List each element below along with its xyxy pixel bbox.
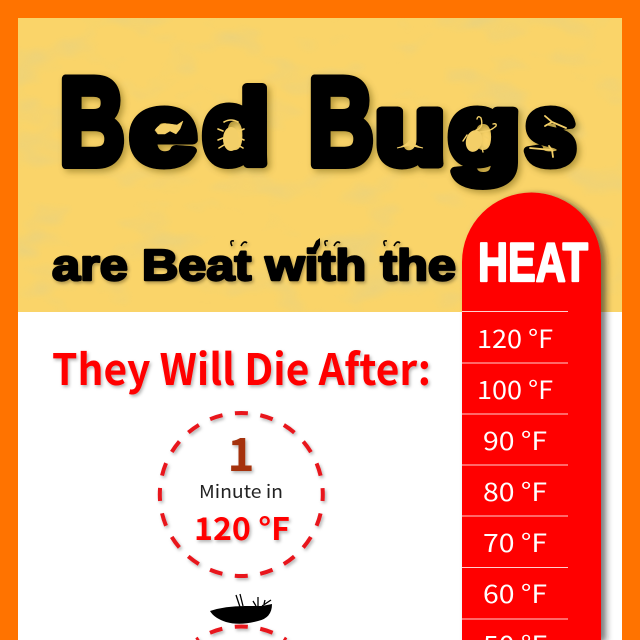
icon: bug cutouts in title letters bbox=[155, 116, 566, 157]
title: Bed Bugs: B bbox=[59, 54, 125, 192]
temperature scale: 80 °F bbox=[483, 473, 547, 509]
temperature scale bbox=[462, 312, 568, 640]
caption: Minute in bbox=[199, 478, 283, 504]
panel: white lower area bbox=[18, 312, 622, 640]
title: Bed Bugs: u bbox=[374, 74, 446, 186]
title: Bed Bugs: s bbox=[524, 74, 576, 186]
temperature: 120 °F bbox=[194, 504, 290, 549]
temperature scale: 60 °F bbox=[483, 575, 547, 611]
title: Bed Bugs: B bbox=[308, 54, 374, 192]
temperature scale: 90 °F bbox=[483, 422, 547, 458]
number: 1 bbox=[227, 419, 255, 485]
thermometer bbox=[462, 193, 601, 640]
dashed ring bbox=[160, 413, 323, 576]
temperature scale: 100 °F bbox=[477, 371, 553, 407]
title: Bed Bugs: d bbox=[202, 70, 270, 186]
panel: yellow header bbox=[18, 18, 622, 312]
heading: They Will Die After: They Will Die After: bbox=[52, 336, 431, 398]
temperature scale: 120 °F bbox=[477, 320, 553, 356]
title: Bed Bugs: e bbox=[130, 74, 197, 186]
heading: HEAT: HEAT bbox=[478, 231, 588, 293]
subtitle: are Beat with the: are Beat with the bbox=[52, 241, 456, 290]
title: Bed Bugs bbox=[59, 54, 576, 192]
icon: dead bed bug bbox=[210, 594, 272, 624]
circle: next temperature, cropped bbox=[196, 627, 286, 640]
temperature scale: 70 °F bbox=[483, 524, 547, 560]
thermometer body bbox=[462, 193, 601, 640]
circle: 1 minute in 120 F bbox=[160, 413, 323, 576]
title: Bed Bugs: g bbox=[448, 74, 521, 186]
